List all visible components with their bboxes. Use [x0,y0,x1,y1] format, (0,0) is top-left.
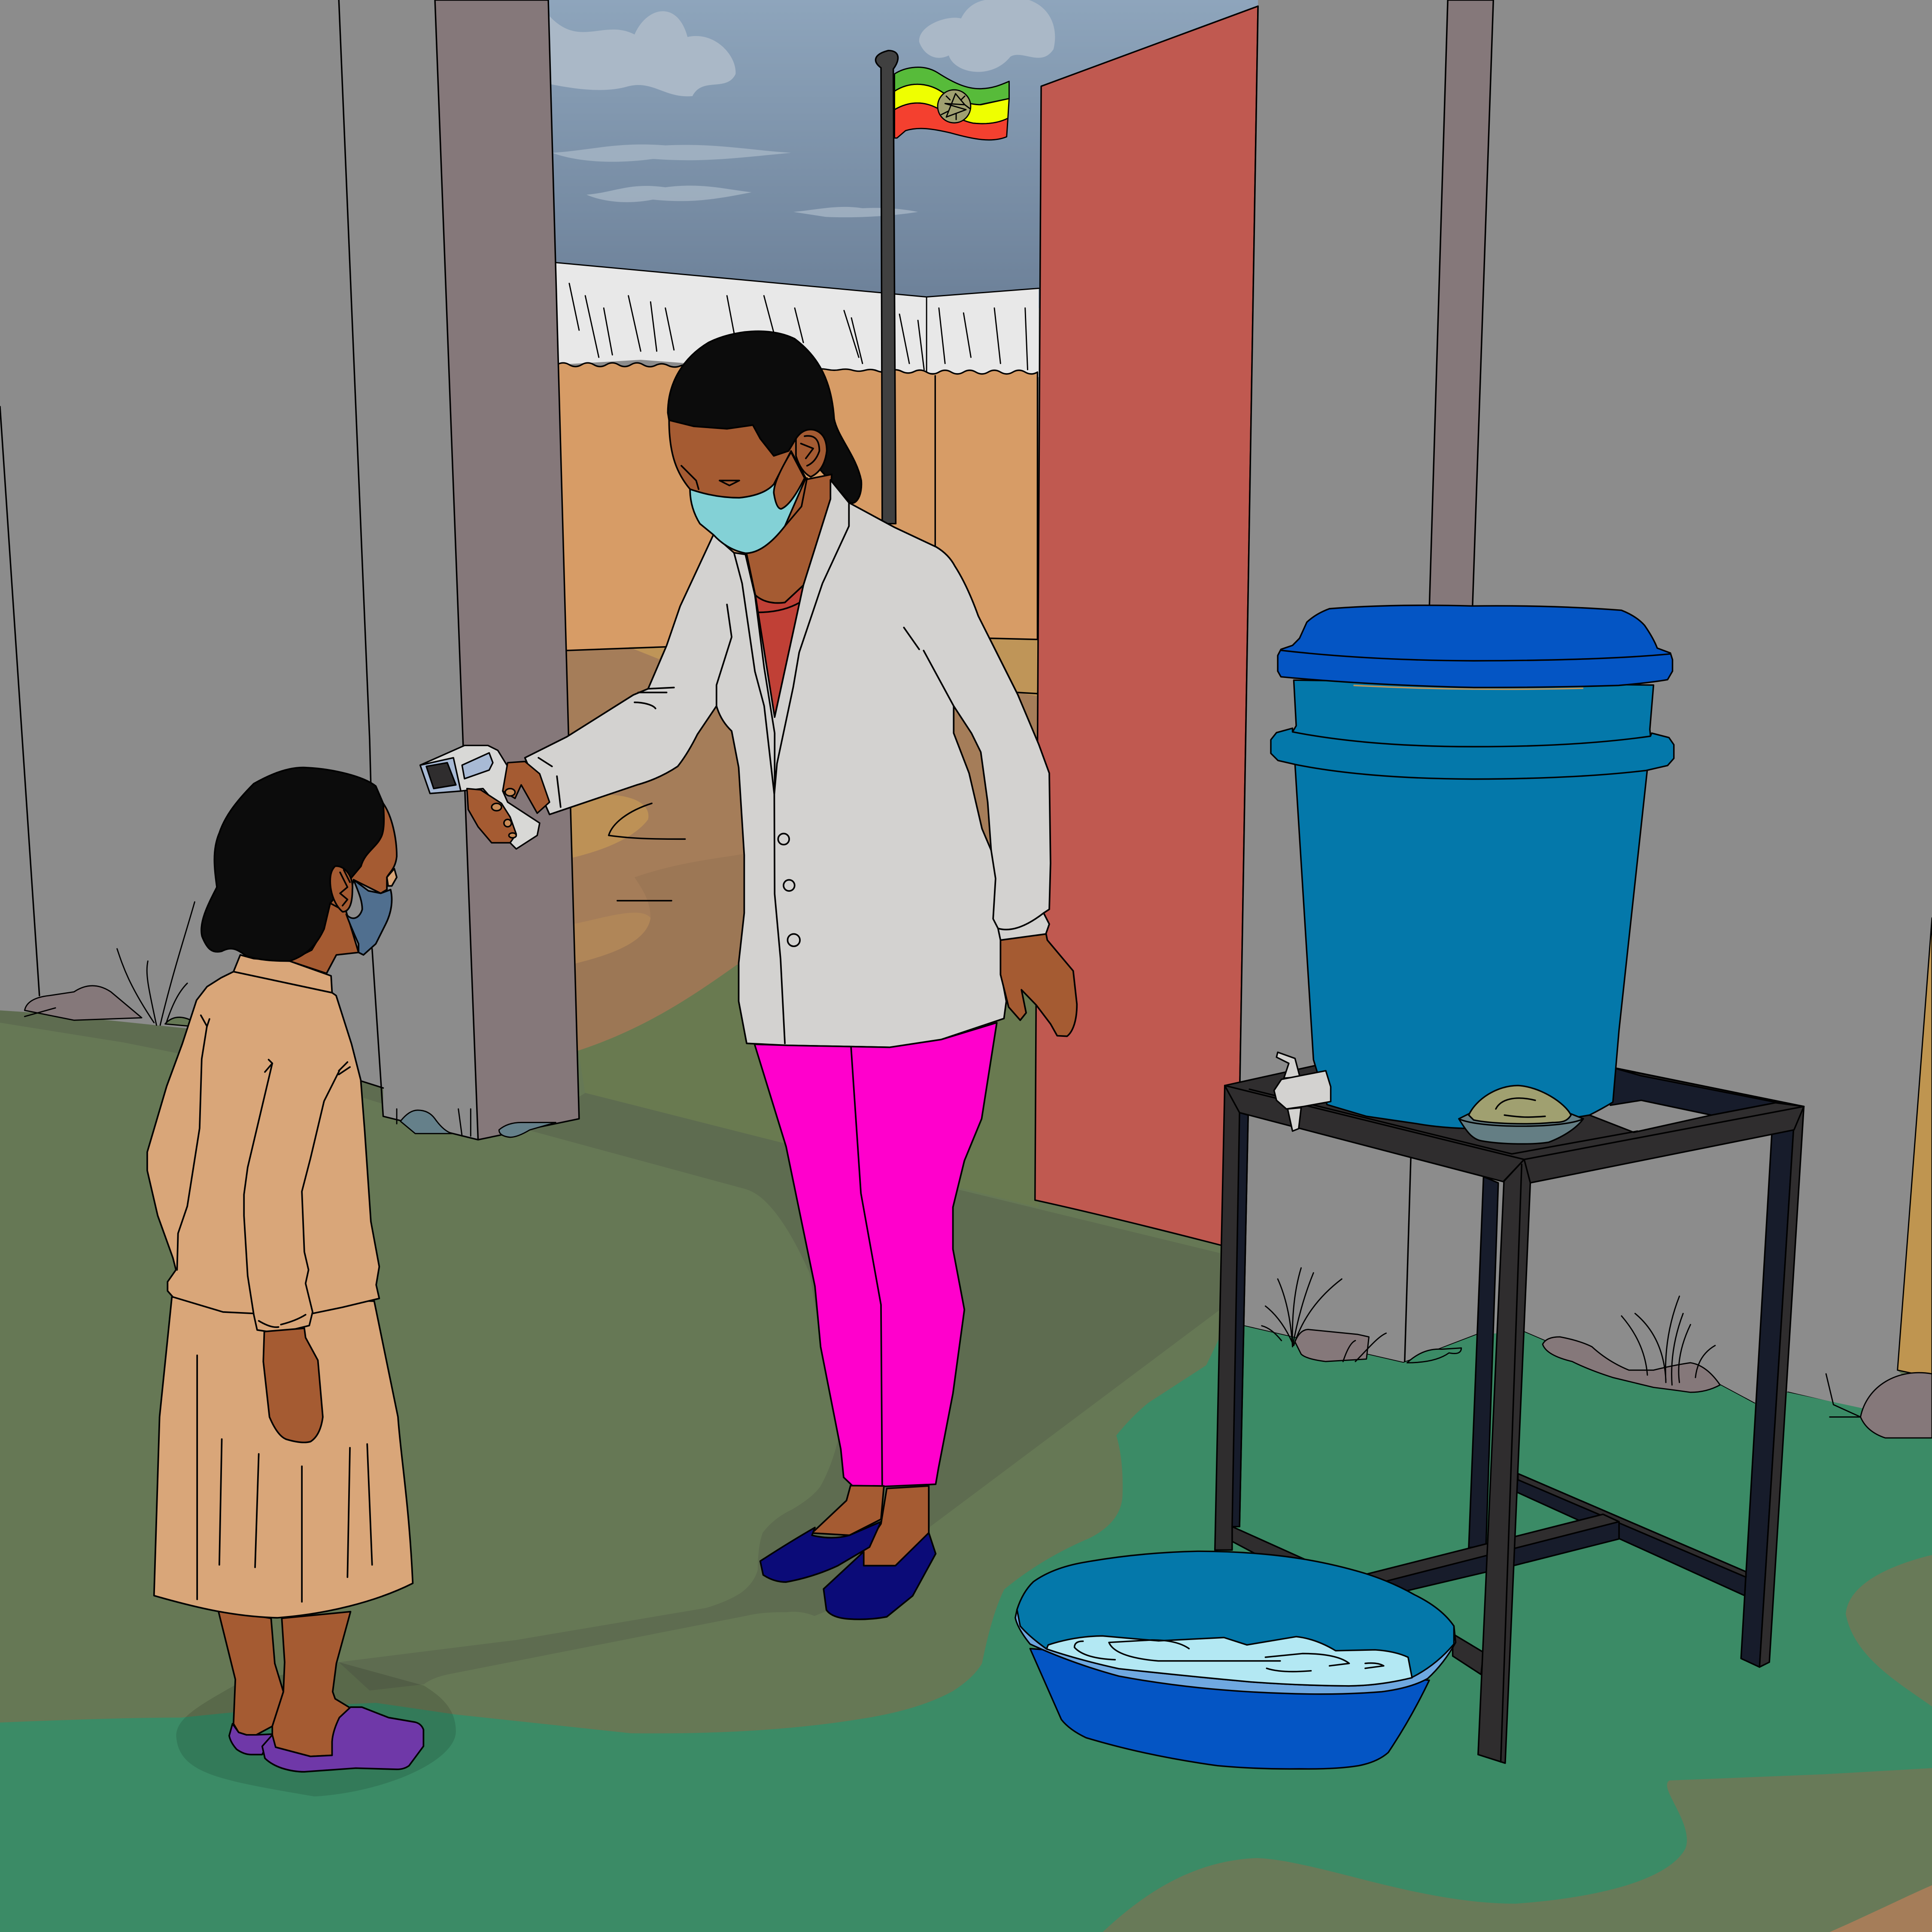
basin inside [1017,1551,1454,1686]
orange back wall [557,363,1037,650]
table top frame [1225,1062,1804,1190]
woman hand right [1000,934,1077,1036]
barrel body [1295,764,1647,1129]
wall seams [1237,6,1861,1411]
soap dish [1459,1085,1583,1144]
Ethiopian flag [895,67,1009,140]
back center leg [1469,1177,1498,1548]
child neck [289,903,358,973]
woman ponytail and hair [668,331,861,503]
coat lines [538,503,1044,1047]
thermometer display [462,753,493,779]
thermometer body [420,745,540,849]
woman coat with sleeves [525,480,1051,1047]
basin rim band [1015,1610,1455,1694]
left stretcher [1232,1527,1306,1562]
grey post [435,0,579,1140]
child mask [346,880,392,955]
lid seam [1281,650,1671,661]
rear stretcher [1517,1473,1746,1596]
left grey walls [0,0,478,1140]
basin water [1047,1636,1412,1686]
clouds [548,0,1055,217]
front stretcher end [1453,1634,1483,1674]
barrel neck [1293,680,1653,754]
child ear [330,866,352,912]
child body shadow [176,1662,456,1796]
water station table [1215,1062,1804,1763]
table far frame [1610,1067,1804,1115]
child top [147,972,379,1313]
door and woman shadow on ground [339,1093,1220,1691]
ear detail [801,436,819,466]
water ripples [1075,1640,1384,1671]
thermometer sensor face [420,758,461,793]
woman eye line and mouth [681,466,739,489]
left leg inner face [1232,1113,1248,1527]
child shoes [229,1724,272,1755]
red top hem line [758,602,800,612]
child skirt [154,1297,413,1618]
lid sliver gap [1354,686,1583,689]
water barrel [1271,605,1674,1129]
brown dirt courtyard [564,638,1039,1051]
white upper back wall [554,262,1039,377]
right grey wall [1237,0,1932,1429]
back right leg [1741,1130,1793,1667]
olive patches in grass [1103,1555,1932,1932]
front leg [1478,1160,1530,1763]
green grass [0,1326,1932,1932]
woman neck [745,474,832,603]
woman feet [812,1485,884,1535]
woman health worker [525,331,1077,1619]
basin lower body [1030,1649,1429,1769]
child collar [234,955,332,993]
top wrinkles [177,1015,350,1327]
woman ear [796,430,827,477]
woman mask [690,451,806,553]
sky [542,0,1269,308]
base ground [0,986,1932,1932]
finger nails [492,789,516,838]
barrel rim [1271,728,1674,779]
upper thumb of hand [503,762,550,813]
child [147,768,456,1796]
table top inset lines [1225,1085,1804,1183]
child sleeve [244,1063,339,1333]
flag pole [875,51,898,524]
upper olive ground [578,863,1039,1207]
soap bar [1469,1085,1571,1124]
lower fingers [467,789,516,843]
red top [755,585,803,717]
brown corner patch [1830,1885,1932,1932]
thermometer lens [426,762,456,789]
left ground shadow band [0,1008,383,1104]
mask ear loop [774,452,805,509]
barrel lid [1278,605,1673,687]
child arm and hand [263,1328,323,1443]
child legs [218,1610,283,1735]
orange right wall sliver [1898,918,1932,1378]
water tap [1274,1052,1331,1131]
child hair [201,768,384,961]
pink trousers [755,1023,997,1486]
woman face [669,420,801,530]
trouser inner line [851,1047,882,1486]
ear scribble [340,870,350,905]
wash basin [1015,1551,1455,1769]
child face [330,803,397,912]
far frame top strip [1615,1068,1804,1106]
back right leg side [1759,1106,1804,1667]
woman shoes [760,1522,881,1582]
mask second strap [785,478,807,526]
gap between arm and body [954,706,991,850]
right post [1429,0,1493,610]
red door [1035,6,1258,1249]
child lips [387,869,397,886]
skirt pleats [197,1355,372,1602]
stones and grass tufts [24,902,1932,1438]
left leg [1215,1085,1248,1550]
cross stretcher [1367,1514,1619,1591]
infrared thermometer with hand [420,745,550,849]
coat buttons [778,833,800,946]
